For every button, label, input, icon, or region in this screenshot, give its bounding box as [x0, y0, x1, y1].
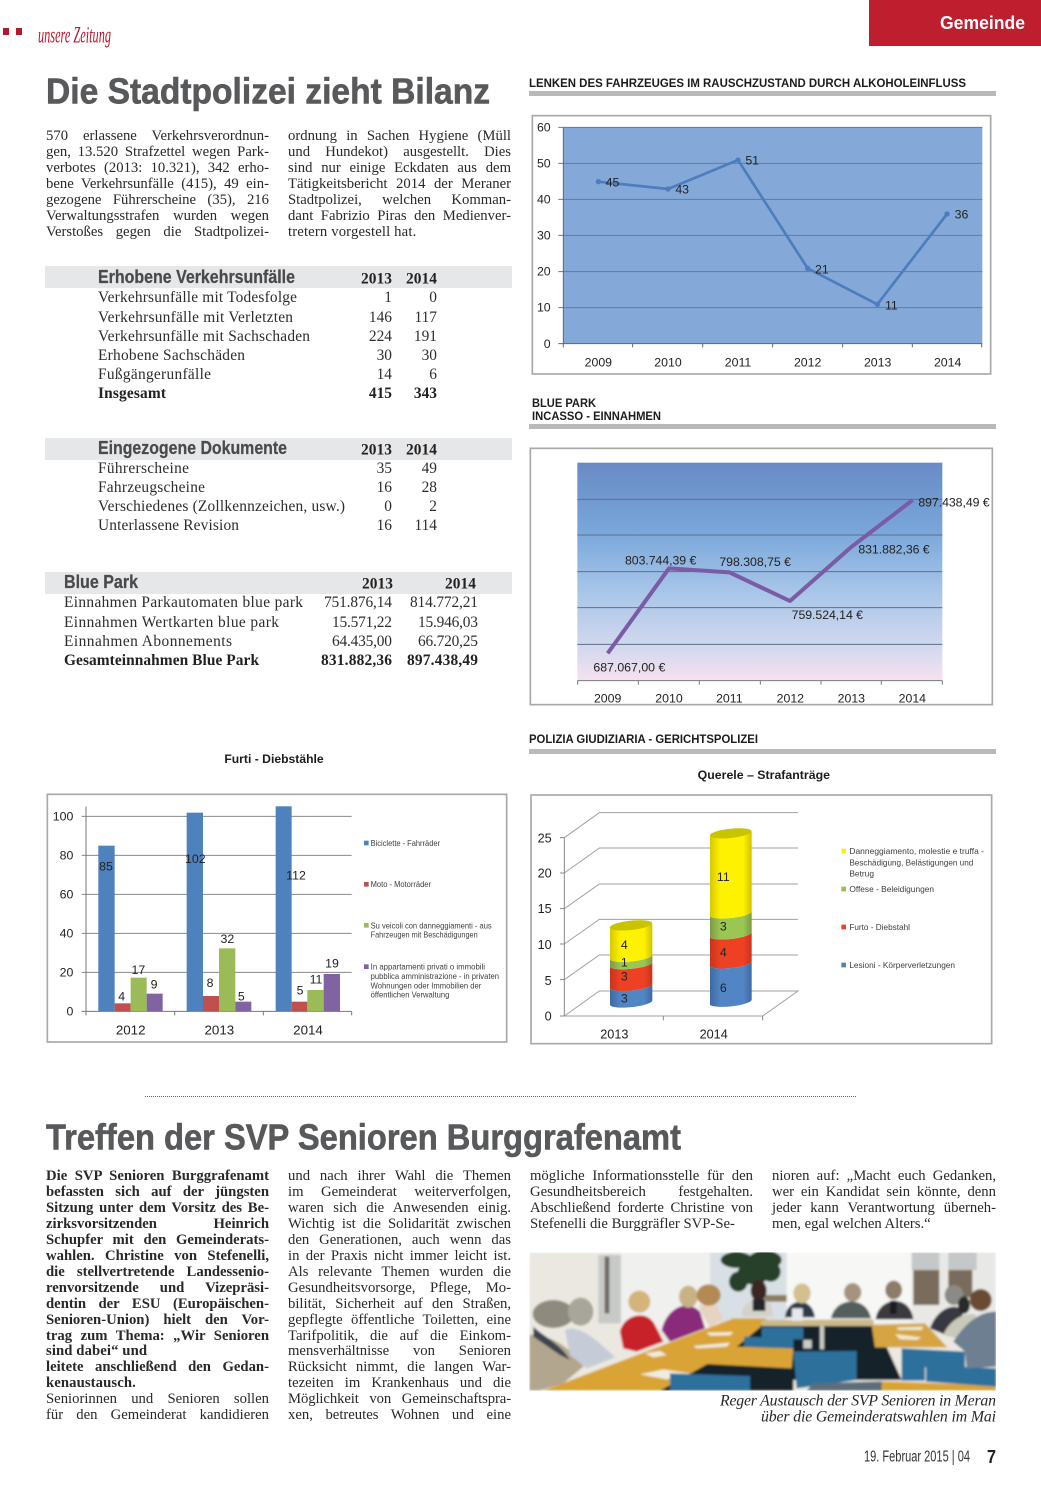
legend: öffentlichen Verwaltung — [371, 990, 450, 1000]
cylinder 2014: 3 — [720, 920, 727, 934]
line chart: Blue Park income: 2011 — [716, 692, 743, 706]
stacked cylinder chart: Querele - Strafanträge: 10 — [538, 938, 552, 952]
line chart: Blue Park income: 759.524,14 € — [792, 608, 863, 622]
line chart: Alkoholeinfluss 2009-2014: 10 — [537, 301, 551, 315]
table: Eingezogene Dokumente: 2014 — [406, 442, 437, 458]
table: Erhobene Verkehrsunfälle: Erhobene Verkehrsunfälle — [98, 267, 295, 287]
legend: Offese - Beleidigungen — [849, 884, 934, 894]
table: Eingezogene Dokumente: Verschiedenes (Zollkennzeichen, usw.) — [98, 498, 345, 515]
article text: column 1: zirksvorsitzenden Heinrich — [46, 1216, 269, 1232]
article text: column 2: in der Praxis nicht immer leicht ist. — [288, 1248, 511, 1264]
intro text: column 1: 570 erlassene Verkehrsverordnun- — [46, 128, 269, 144]
table: Blue Park — [45, 572, 512, 669]
article text: column 4: nioren auf: „Macht euch Gedanken, — [772, 1168, 996, 1184]
intro text: column 1: gen, 13.520 Strafzettel wegen Park- — [46, 144, 269, 160]
table: Erhobene Verkehrsunfälle: 1 — [384, 289, 392, 306]
bar chart: Furti - Diebstähle: 40 — [60, 926, 73, 940]
table: Eingezogene Dokumente: 2 — [429, 498, 437, 515]
article text: column 4 — [772, 1168, 996, 1232]
line chart: Alkoholeinfluss 2009-2014: 21 — [815, 262, 829, 276]
stacked cylinder chart: Querele - Strafanträge: 2013 — [600, 1028, 628, 1042]
article text: column 3: Gesundheitsbereich festgehalten. — [530, 1184, 753, 1200]
cylinder 2014: 11 — [717, 870, 730, 884]
article text: column 1: dentin der ESU (Europäischen- — [46, 1296, 269, 1312]
table: Eingezogene Dokumente: 0 — [384, 498, 392, 515]
table: Eingezogene Dokumente: 49 — [422, 460, 437, 477]
line chart: Blue Park income: 798.308,75 € — [719, 555, 791, 569]
legend: Su veicoli con danneggiamenti - aus — [371, 921, 492, 931]
intro text: column 1: bene Verkehrsunfälle (415), 49 ein- — [46, 176, 269, 192]
table: Eingezogene Dokumente: 28 — [422, 479, 437, 496]
section tab: Gemeinde — [869, 0, 1041, 46]
article text: column 2: waren sich die Anwesenden einig. — [288, 1200, 511, 1216]
line chart: Alkoholeinfluss 2009-2014: 30 — [537, 229, 551, 243]
chairs — [670, 1327, 996, 1391]
intro text: column 2 — [288, 128, 511, 240]
table: Erhobene Verkehrsunfälle: 6 — [429, 366, 437, 383]
cylinder 2013: 3 — [621, 991, 628, 1005]
article text: column 2: im Gemeinderat weiterverfolgen, — [288, 1184, 511, 1200]
bar chart: Furti - Diebstähle: 19 — [325, 956, 339, 970]
article text: column 4: jeder kann Verantwortung überneh- — [772, 1200, 996, 1216]
line chart: Alkoholeinfluss 2009-2014: 60 — [537, 120, 551, 134]
article text: column 1: Die SVP Senioren Burggrafenamt — [46, 1168, 269, 1184]
article text: column 2: Gesundheitsvorsorge, Pflege, Mo- — [288, 1280, 511, 1296]
table: Erhobene Verkehrsunfälle: 343 — [414, 385, 437, 402]
intro text: column 2: Stadtpolizei, welchen Komman- — [288, 192, 511, 208]
table: Erhobene Verkehrsunfälle: 146 — [369, 309, 392, 326]
table: Blue Park: 66.720,25 — [418, 633, 478, 650]
table: Erhobene Verkehrsunfälle: Verkehrsunfälle mit Verletzten — [98, 309, 293, 326]
bar chart: Furti - Diebstähle: 80 — [60, 848, 73, 862]
line chart: Alkoholeinfluss 2009-2014: 50 — [537, 156, 551, 170]
article text: column 1: Seniorinnen und Senioren sollen — [46, 1391, 269, 1407]
line chart: Alkoholeinfluss 2009-2014: 40 — [537, 192, 551, 206]
plant leaves — [721, 1251, 782, 1292]
chart heading: Blue Park Einnahmen — [529, 396, 996, 429]
chart heading: Blue Park Einnahmen: BLUE PARK — [532, 396, 596, 410]
article text: column 3 — [530, 1168, 753, 1232]
table: Blue Park: 751.876,14 — [324, 594, 392, 611]
cylinder 2013: 4 — [621, 938, 628, 952]
article text: column 1: wahlen. Christine von Stefenelli, — [46, 1248, 269, 1264]
tables — [543, 1318, 793, 1391]
table: Erhobene Verkehrsunfälle: 14 — [377, 366, 392, 383]
table: Blue Park: 15.946,03 — [418, 614, 478, 631]
article text: column 3: Abschließend forderte Christine von — [530, 1200, 753, 1216]
line chart: Alkoholeinfluss 2009-2014: 2013 — [864, 355, 892, 369]
line chart: Blue Park income: 2013 — [838, 692, 865, 706]
line chart: Alkoholeinfluss 2009-2014: 2010 — [654, 355, 682, 369]
table: Eingezogene Dokumente: Unterlassene Revision — [98, 517, 239, 534]
article text: column 1: befassten sich auf der jüngsten — [46, 1184, 269, 1200]
bar chart: Furti - Diebstähle: 8 — [207, 976, 214, 990]
table: Erhobene Verkehrsunfälle: 2014 — [406, 270, 437, 288]
line chart: Alkoholeinfluss 2009-2014: 0 — [544, 337, 551, 351]
intro text: column 2: tretern vorgestell hat. — [288, 224, 416, 240]
bar chart: Furti - Diebstähle — [47, 753, 507, 1042]
line chart: Alkoholeinfluss 2009-2014: 36 — [955, 208, 969, 222]
table: Erhobene Verkehrsunfälle: 30 — [422, 347, 437, 364]
line chart: Blue Park income: 2009 — [594, 692, 622, 706]
table: Blue Park: 15.571,22 — [332, 614, 392, 631]
dark space under tables — [660, 1325, 902, 1391]
heading: Die Stadtpolizei zieht Bilanz: Die Stadtpolizei zieht Bilanz — [46, 70, 490, 112]
article text: column 2: Möglichkeit von Gemeinschaftspra- — [288, 1391, 511, 1407]
line chart: Blue Park income — [530, 448, 992, 706]
stacked cylinder chart: Querele - Strafanträge: 0 — [545, 1010, 552, 1024]
legend: In appartamenti privati o immobili — [371, 962, 485, 972]
line chart: Alkoholeinfluss 2009-2014: 11 — [885, 298, 898, 312]
table: Eingezogene Dokumente: 2013 — [361, 442, 392, 458]
legend: Beschädigung, Belästigungen und — [849, 857, 974, 867]
table: Blue Park: Einnahmen Abonnements — [64, 633, 232, 650]
table: Blue Park: Einnahmen Parkautomaten blue park — [64, 594, 303, 611]
bar chart: Furti - Diebstähle: 20 — [60, 966, 73, 980]
legend — [364, 838, 499, 1000]
table: Eingezogene Dokumente: Führerscheine — [98, 460, 189, 477]
table: Blue Park: Blue Park — [64, 572, 139, 592]
stacked cylinder chart: Querele - Strafanträge: 5 — [545, 974, 552, 988]
legend: Wohnungen oder Immobilien der — [371, 980, 482, 990]
bar chart: Furti - Diebstähle: 100 — [53, 809, 73, 823]
logo: unsere Zeitung — [3, 22, 111, 48]
table: Blue Park: Gesamteinnahmen Blue Park — [64, 652, 259, 669]
line chart: Alkoholeinfluss 2009-2014: 2011 — [725, 355, 751, 369]
bar chart: Furti - Diebstähle: 17 — [131, 963, 145, 977]
bar chart: Furti - Diebstähle: 2013 — [205, 1022, 234, 1037]
stacked cylinder chart: Querele - Strafanträge: 20 — [538, 866, 552, 880]
table: Erhobene Verkehrsunfälle: 0 — [429, 289, 437, 306]
table: Blue Park: Einnahmen Wertkarten blue park — [64, 614, 279, 631]
line chart: Alkoholeinfluss 2009-2014: 51 — [745, 154, 759, 168]
bar chart: Furti - Diebstähle: 4 — [118, 990, 125, 1004]
chart heading: Lenken des Fahrzeuges — [529, 76, 996, 96]
section tab: Gemeinde: Gemeinde — [940, 13, 1025, 33]
article text: column 2: tezeiten im Krankenhaus und die — [288, 1375, 511, 1391]
table: Blue Park: 2013 — [362, 576, 393, 592]
article text: column 1: Sitzung unter dem Vorsitz des Be- — [46, 1200, 269, 1216]
intro text: column 2: ordnung in Sachen Hygiene (Müll — [288, 128, 511, 144]
article text: column 1: die stellvertretende Landessenio- — [46, 1264, 269, 1280]
article text: column 2: Als relevante Themen wurden die — [288, 1264, 511, 1280]
bar chart: Furti - Diebstähle: 60 — [60, 887, 73, 901]
table: Blue Park: 897.438,49 — [407, 652, 478, 669]
article text: column 1: renvorsitzende und Vizepräsi- — [46, 1280, 269, 1296]
chart title: Querele – Strafanträge — [698, 769, 831, 782]
bar chart: Furti - Diebstähle: 11 — [310, 972, 323, 986]
legend: Biciclette - Fahrräder — [371, 838, 440, 848]
table: Eingezogene Dokumente: 16 — [377, 517, 392, 534]
article text: column 1: für den Gemeinderat kandidieren — [46, 1407, 269, 1423]
line chart: Blue Park income: 897.438,49 € — [918, 495, 990, 509]
table: Erhobene Verkehrsunfälle: 224 — [369, 328, 392, 345]
table: Eingezogene Dokumente: 16 — [377, 479, 392, 496]
people — [529, 1335, 583, 1391]
photo: meeting of SVP seniors around tables — [529, 1251, 996, 1391]
table: Eingezogene Dokumente: Eingezogene Dokumente — [98, 438, 287, 458]
table: Eingezogene Dokumente — [45, 438, 512, 534]
bar chart: Furti - Diebstähle: 5 — [297, 984, 304, 998]
table: Erhobene Verkehrsunfälle: Verkehrsunfälle mit Todesfolge — [98, 289, 297, 306]
article text: column 2: Tarifpolitik, die auf die Einkom- — [288, 1328, 511, 1344]
line chart: Alkoholeinfluss 2009-2014 — [532, 116, 991, 374]
stacked cylinder chart: Querele - Strafanträge: 25 — [538, 831, 552, 845]
intro text: column 1 — [46, 128, 269, 240]
heading: Treffen der SVP Senioren Burggrafenamt: Treffen der SVP Senioren Burggrafenamt — [46, 1116, 681, 1158]
legend — [841, 846, 984, 970]
intro text: column 1: verbotes (2013: 10.321), 342 erho- — [46, 160, 269, 176]
table: Erhobene Verkehrsunfälle: 2013 — [361, 270, 392, 288]
line chart: Alkoholeinfluss 2009-2014: 45 — [606, 175, 620, 189]
table: Eingezogene Dokumente: 114 — [414, 517, 437, 534]
intro text: column 1: Verwaltungsstrafen wurden wegen — [46, 208, 269, 224]
chart title: Furti - Diebstähle — [224, 753, 324, 766]
line chart: Alkoholeinfluss 2009-2014: 20 — [537, 265, 551, 279]
cylinder 2013: 3 — [621, 970, 628, 984]
bar chart: Furti - Diebstähle: 2012 — [116, 1022, 145, 1037]
article text: column 1: trag zum Thema: „Wir Senioren — [46, 1328, 269, 1344]
cylinder 2014: 6 — [720, 981, 727, 995]
article text: column 2: Rücksicht nimmt, die langen War- — [288, 1359, 511, 1375]
intro text: column 2: dant Fabrizio Piras den Medienver- — [288, 208, 511, 224]
photo caption — [719, 1392, 996, 1426]
article text: column 4: wer ein Kandidat sein könnte, denn — [772, 1184, 996, 1200]
legend: Furto - Diebstahl — [849, 922, 910, 932]
legend: Moto - Motorräder — [371, 879, 431, 889]
table: Erhobene Verkehrsunfälle: Verkehrsunfälle mit Sachschaden — [98, 328, 310, 345]
bar chart: Furti - Diebstähle: 0 — [66, 1005, 73, 1019]
table: Erhobene Verkehrsunfälle: Erhobene Sachschäden — [98, 347, 245, 364]
chart heading: Polizia Giudiziaria — [529, 732, 996, 754]
footer: date and page number: 19. Februar 2015 | 04 — [864, 1448, 970, 1466]
table: Erhobene Verkehrsunfälle — [45, 266, 512, 402]
line chart: Alkoholeinfluss 2009-2014: 2012 — [794, 355, 822, 369]
article text: column 3: mögliche Informationsstelle für den — [530, 1168, 753, 1184]
article text: column 2: und nach ihrer Wahl die Themen — [288, 1168, 511, 1184]
article text: column 2: Wichtig ist die Solidarität zwischen — [288, 1216, 511, 1232]
cylinder 2013 — [609, 918, 653, 1008]
intro text: column 2: Tätigkeitsbericht 2014 der Meraner — [288, 176, 511, 192]
legend: Lesioni - Körperverletzungen — [849, 960, 955, 970]
article text: column 1: Schupfer mit den Gemeinderats- — [46, 1232, 269, 1248]
line chart: Alkoholeinfluss 2009-2014: 2014 — [934, 355, 962, 369]
cylinder 2014 — [709, 826, 752, 1007]
article text: column 1: leitete anschließend den Gedan- — [46, 1359, 269, 1375]
table: Eingezogene Dokumente: 35 — [377, 460, 392, 477]
photo caption: über die Gemeinderatswahlen im Mai — [761, 1408, 996, 1426]
stacked cylinder chart: Querele - Strafanträge — [531, 769, 992, 1044]
article text: column 3: Stefenelli die Burggräfler SVP-Se- — [530, 1216, 735, 1232]
article text: column 2: den Generationen, auch wenn das — [288, 1232, 511, 1248]
legend: Danneggiamento, molestie e truffa - — [849, 846, 984, 856]
bar chart: Furti - Diebstähle: 102 — [185, 852, 206, 866]
article text: column 1: sind dabei“ und — [46, 1343, 147, 1359]
table: Blue Park: 2014 — [445, 576, 476, 592]
table: Erhobene Verkehrsunfälle: 415 — [369, 385, 392, 402]
line chart: Alkoholeinfluss 2009-2014: 2009 — [585, 355, 612, 369]
table: Erhobene Verkehrsunfälle: 191 — [414, 328, 437, 345]
line chart: Blue Park income: 803.744,39 € — [625, 554, 696, 568]
article text: column 1: kenaustausch. — [46, 1375, 136, 1391]
logo: unsere Zeitung: unsere Zeitung — [38, 22, 111, 48]
line chart: Blue Park income: 687.067,00 € — [593, 660, 665, 674]
line chart: Blue Park income: 2010 — [655, 692, 683, 706]
line chart: Blue Park income: 2014 — [899, 692, 926, 706]
table: Erhobene Verkehrsunfälle: Insgesamt — [98, 385, 167, 402]
table: Erhobene Verkehrsunfälle: 30 — [377, 347, 392, 364]
article text: column 2: xen, betreutes Wohnen und eine — [288, 1407, 511, 1423]
chart heading: Blue Park Einnahmen: INCASSO - EINNAHMEN — [532, 409, 661, 423]
stacked cylinder chart: Querele - Strafanträge: 15 — [538, 902, 552, 916]
photo caption: Reger Austausch der SVP Senioren in Meran — [719, 1392, 996, 1410]
footer: date and page number: 7 — [987, 1447, 996, 1467]
table: Erhobene Verkehrsunfälle: Fußgängerunfälle — [98, 366, 211, 383]
line chart: Blue Park income: 831.882,36 € — [858, 543, 930, 557]
dotted divider — [145, 1096, 856, 1098]
table: Blue Park: 64.435,00 — [332, 633, 392, 650]
article text: column 4: men, egal welchen Alters.“ — [772, 1216, 931, 1232]
intro text: column 2: sind nur einige Eckdaten aus dem — [288, 160, 511, 176]
intro text: column 1: Verstoßes gegen die Stadtpolizei- — [46, 224, 269, 240]
table: Erhobene Verkehrsunfälle: 117 — [414, 309, 437, 326]
table: Blue Park: 831.882,36 — [321, 652, 392, 669]
chart heading: Lenken des Fahrzeuges: LENKEN DES FAHRZEUGES IM RAUSCHZUSTAND DURCH ALKOHOLEINFLUSS — [529, 76, 966, 90]
cylinder 2013: 1 — [621, 956, 628, 970]
article text: column 2 — [288, 1168, 511, 1423]
cylinder 2014: 4 — [720, 945, 727, 959]
bar chart: Furti - Diebstähle: 112 — [286, 868, 306, 882]
stacked cylinder chart: Querele - Strafanträge: 2014 — [700, 1028, 728, 1042]
bar chart: Furti - Diebstähle: 2014 — [293, 1022, 323, 1037]
line chart: Alkoholeinfluss 2009-2014: 43 — [675, 183, 689, 197]
table: Blue Park: 814.772,21 — [410, 594, 478, 611]
line chart: Blue Park income: 2012 — [777, 692, 804, 706]
article text: column 2: mensverhältnisse von Senioren — [288, 1343, 511, 1359]
article text: column 1: Senioren-Union) hielt den Vor- — [46, 1312, 269, 1328]
article text: column 2: gepflegte öffentliche Toiletten, eine — [288, 1312, 511, 1328]
legend: Fahrzeugen mit Beschädigungen — [371, 930, 478, 940]
bar chart: Furti - Diebstähle: 32 — [220, 932, 234, 946]
bar chart: Furti - Diebstähle: 9 — [151, 977, 158, 991]
bar chart: Furti - Diebstähle: 5 — [238, 990, 245, 1004]
table: Eingezogene Dokumente: Fahrzeugscheine — [98, 479, 205, 496]
article text: column 1 — [46, 1168, 269, 1423]
legend: pubblica amministrazione - in privaten — [371, 971, 499, 981]
intro text: column 2: und Hundekot) ausgestellt. Dies — [288, 144, 511, 160]
intro text: column 1: gezogene Führerscheine (35), 216 — [46, 192, 269, 208]
bar chart: Furti - Diebstähle: 85 — [99, 860, 113, 874]
chart heading: Polizia Giudiziaria: POLIZIA GIUDIZIARIA - GERICHTSPOLIZEI — [529, 732, 758, 746]
article text: column 2: bilität, Sicherheit auf den Straßen, — [288, 1296, 511, 1312]
legend: Betrug — [849, 869, 874, 879]
